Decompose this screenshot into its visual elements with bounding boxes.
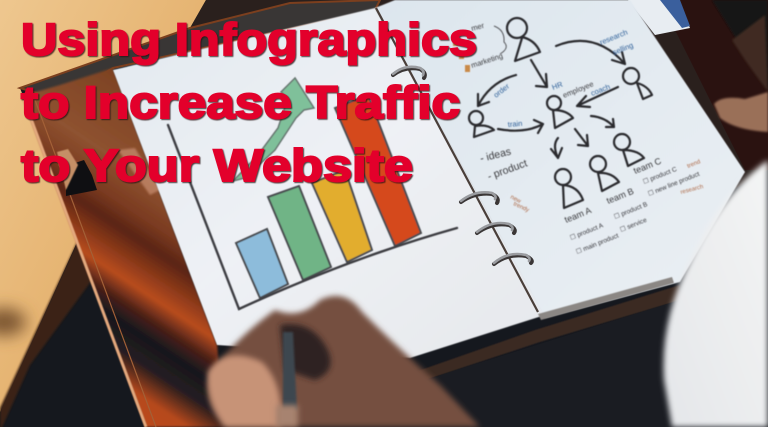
notes: checklists: ☐ product A bbox=[569, 221, 605, 242]
notes: blue labels bbox=[492, 28, 634, 129]
lit fingers bbox=[208, 355, 281, 427]
notes: brown remarks: research bbox=[680, 184, 704, 196]
notes: checklists: ☐ new line product bbox=[647, 170, 701, 198]
notes: team labels: team B bbox=[605, 186, 635, 206]
notes: checklists bbox=[569, 165, 701, 256]
binder rings bbox=[393, 67, 532, 264]
title: to Increase Traffic bbox=[21, 77, 460, 128]
notes: blue labels: order bbox=[492, 81, 511, 100]
wooden desk bbox=[0, 0, 206, 427]
notes: top list: mer bbox=[470, 21, 485, 33]
pen bbox=[283, 332, 297, 412]
lower dark clothing bbox=[425, 300, 690, 427]
notes: ideas and product: - product bbox=[486, 157, 529, 183]
notes: blue labels: HR bbox=[551, 80, 564, 92]
binding bbox=[376, 8, 538, 312]
bracket bbox=[494, 26, 506, 54]
hand holding pen bbox=[208, 296, 480, 427]
yellow bar bbox=[312, 170, 372, 262]
right dark folder and basket bbox=[628, 0, 768, 170]
notes: brown remarks bbox=[509, 159, 704, 214]
notes: brown remarks: trendy bbox=[512, 201, 530, 214]
title: to Your Website bbox=[21, 140, 413, 191]
page bottom shading bbox=[538, 277, 674, 320]
leather folder left panel bbox=[22, 68, 225, 427]
notes: blue labels: research bbox=[598, 28, 629, 47]
notes: blue labels: train bbox=[507, 119, 523, 129]
notebook right page bbox=[375, 0, 745, 318]
notes: ideas and product: - ideas bbox=[479, 146, 512, 165]
notes: checklists: ☐ main product bbox=[575, 231, 620, 256]
notes: checklists: ☐ product C bbox=[642, 165, 678, 186]
green bar bbox=[268, 186, 331, 280]
chart axes bbox=[168, 125, 457, 309]
org chart sketch bbox=[453, 18, 704, 256]
notes: brown remarks: trend bbox=[687, 159, 701, 170]
leather folder top band bbox=[20, 0, 380, 100]
thumb at right bbox=[714, 92, 768, 132]
notes: checklists: ☐ product B bbox=[613, 200, 649, 221]
title: Using Infographics bbox=[21, 14, 477, 65]
notes: brown remarks: new bbox=[509, 194, 522, 205]
red bar bbox=[335, 95, 421, 246]
notes: team labels bbox=[563, 156, 663, 225]
person: team B bbox=[590, 156, 619, 191]
notes: top list: marketing bbox=[470, 51, 504, 70]
person: team C bbox=[614, 134, 644, 166]
page stack at bottom bbox=[415, 285, 680, 380]
dark top table area bbox=[190, 0, 768, 300]
finger shadow bbox=[280, 324, 331, 380]
person: right bbox=[623, 68, 652, 99]
white sleeve bbox=[664, 160, 768, 427]
person: team A bbox=[555, 169, 583, 208]
bar chart sketch bbox=[168, 78, 457, 309]
notebook left page bbox=[113, 8, 545, 358]
person: left bbox=[469, 111, 494, 137]
title bbox=[21, 14, 477, 191]
notes: top list bbox=[453, 21, 504, 72]
notes: blue labels: coach bbox=[589, 82, 611, 98]
notes: checklists: ☐ service bbox=[619, 216, 648, 234]
notes: employee: employee bbox=[561, 79, 595, 100]
arrows bbox=[478, 41, 625, 158]
person: top bbox=[507, 18, 540, 61]
notes: blue labels: selling bbox=[611, 41, 634, 57]
notes: ideas and product bbox=[479, 146, 529, 183]
growth arrow bbox=[233, 78, 314, 181]
notes: team labels: team C bbox=[632, 156, 663, 176]
folder strap clasp bbox=[66, 160, 97, 196]
notes: team labels: team A bbox=[563, 205, 593, 225]
blue bar bbox=[236, 229, 288, 298]
hand back and forearm bbox=[208, 296, 480, 427]
notes: top list: d bbox=[470, 42, 477, 52]
person: centre bbox=[547, 96, 573, 128]
